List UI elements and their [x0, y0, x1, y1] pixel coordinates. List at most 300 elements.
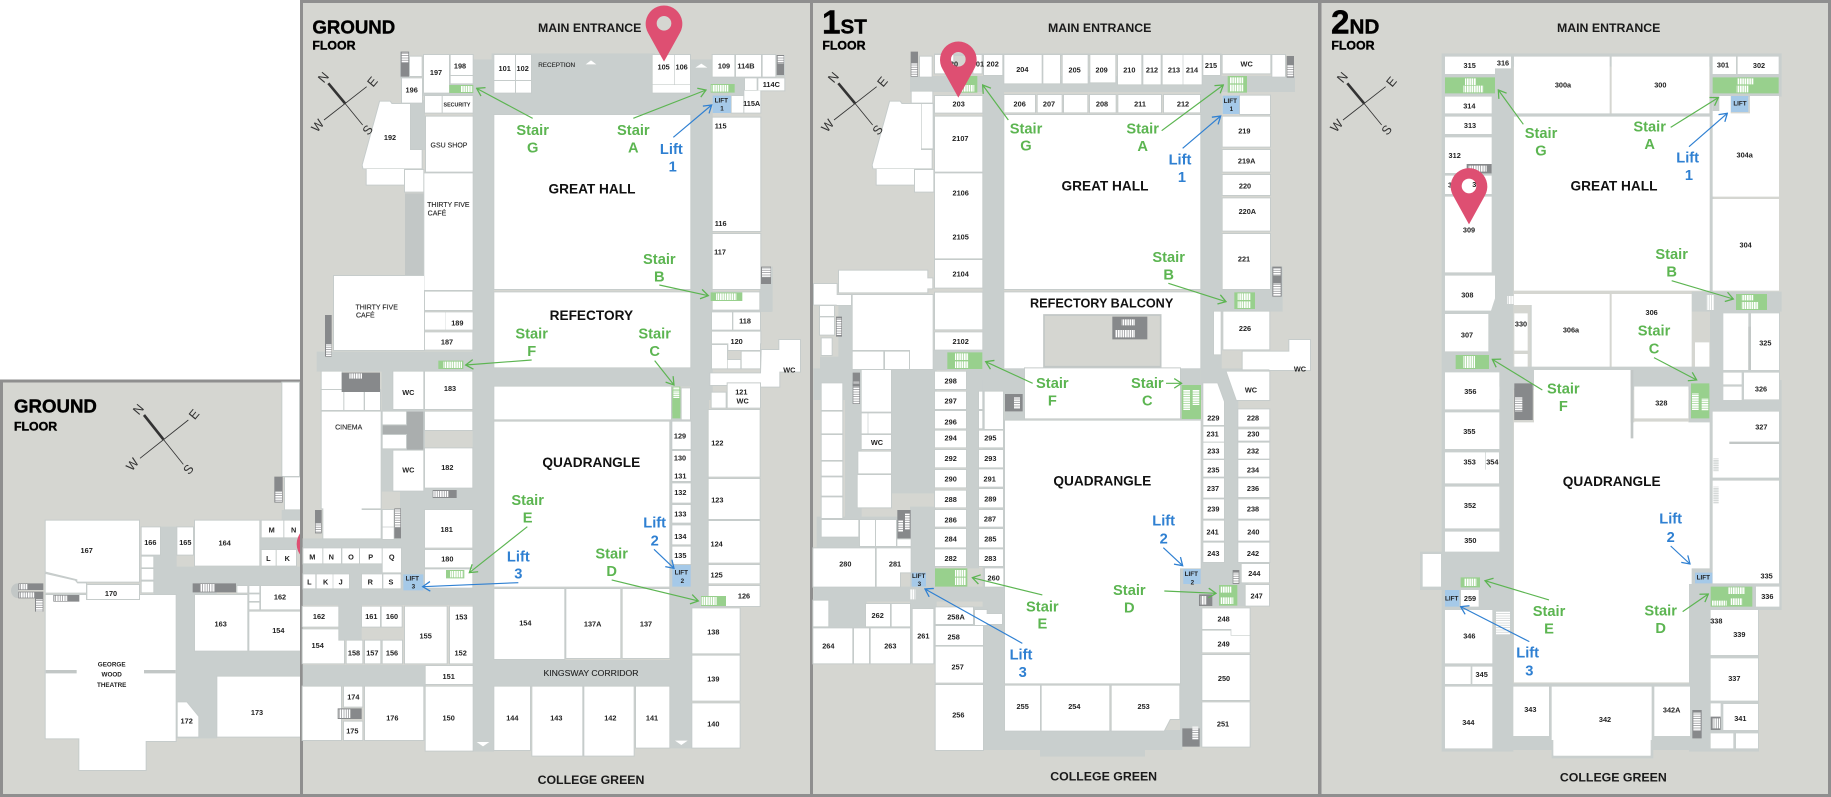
location names [1557, 21, 1667, 784]
room labels: 239 [1207, 505, 1219, 514]
room labels: 291 [984, 475, 996, 484]
room labels: 160 [386, 612, 398, 621]
room labels: RECEPTION [538, 62, 576, 69]
floor plan rooms [303, 55, 800, 756]
room labels: 315 [1464, 61, 1476, 70]
callout: lift 1: Lift [660, 142, 683, 158]
room labels: 124 [711, 539, 724, 548]
icon: location pin [1451, 168, 1487, 224]
room labels: 234 [1247, 465, 1260, 474]
location names: REFECTORY [550, 308, 633, 323]
callout: stair C: Stair [638, 326, 671, 342]
location names: GREAT HALL [1570, 179, 1657, 194]
room labels: 284 [945, 535, 958, 544]
room labels: 250 [1218, 674, 1230, 683]
room labels: 166 [144, 538, 156, 547]
room labels: 243 [1207, 549, 1219, 558]
location names: GREAT HALL [548, 181, 635, 196]
room labels: 263 [884, 641, 896, 650]
callout: stair F: Stair [1547, 382, 1580, 398]
compass: S [870, 122, 886, 138]
room labels: 207 [1043, 99, 1055, 108]
callout: lift 3 [925, 589, 1033, 681]
room labels: 233 [1207, 446, 1219, 455]
room labels: L [307, 578, 312, 587]
compass: W [819, 117, 837, 135]
room labels: 155 [420, 631, 432, 640]
callout: stair C [1638, 324, 1697, 380]
room labels: 153 [455, 612, 467, 621]
heading: first floor: 1ST [822, 4, 867, 41]
room labels: 230 [1247, 430, 1259, 439]
room labels: 248 [1218, 614, 1230, 623]
callout: stair F [1492, 359, 1580, 415]
room labels: 255 [1017, 702, 1029, 711]
room labels: 164 [219, 539, 232, 548]
room labels: 139 [707, 674, 719, 683]
room labels: 220A [1239, 207, 1257, 216]
location names: REFECTORY BALCONY [1030, 297, 1174, 311]
callout: stair G: Stair [1525, 126, 1558, 142]
location names: GREAT HALL [1061, 179, 1148, 194]
callout: lift 2: 2 [1667, 530, 1675, 546]
room labels: 134 [674, 532, 687, 541]
compass [123, 402, 202, 477]
room labels: 293 [984, 454, 996, 463]
room labels: 339 [1733, 630, 1745, 639]
room labels: 115A [743, 99, 761, 108]
room labels: 182 [441, 463, 453, 472]
room labels: 352 [1464, 501, 1476, 510]
location names: COLLEGE GREEN [1050, 770, 1157, 784]
room labels: THIRTY FIVE [355, 304, 398, 311]
heading: ground floor: GROUND [312, 16, 395, 37]
room labels: WC [783, 366, 796, 375]
callout: lift 1: 1 [669, 160, 677, 176]
room labels: 141 [646, 714, 658, 723]
room labels: 326 [1755, 385, 1767, 394]
room labels: 213 [1168, 65, 1180, 74]
room labels: 2102 [953, 337, 969, 346]
callout: stair E [1485, 581, 1566, 638]
room labels: 287 [984, 515, 996, 524]
panel: ground floor [302, 2, 812, 796]
room labels: 138 [707, 628, 719, 637]
room labels: 306 [1646, 308, 1658, 317]
callout: stair C: C [1649, 341, 1660, 357]
room labels: LIFT [1185, 571, 1198, 578]
room labels: 283 [984, 554, 996, 563]
room labels: 211 [1134, 99, 1146, 108]
heading: second floor: FLOOR [1331, 38, 1375, 52]
compass: W [1328, 117, 1346, 135]
callout: stair B: B [1666, 265, 1677, 281]
callout: stair C [1131, 376, 1182, 409]
room labels: 163 [215, 619, 227, 628]
callout: stair B [1152, 250, 1226, 302]
location names: MAIN ENTRANCE [1048, 21, 1151, 35]
room labels: 295 [984, 434, 996, 443]
room labels: 229 [1207, 414, 1219, 423]
room labels: 137A [584, 619, 602, 628]
room labels: 120 [731, 337, 743, 346]
room labels: 346 [1463, 632, 1475, 641]
room labels: 143 [550, 714, 562, 723]
room labels: WC [1241, 59, 1253, 68]
room labels: 117 [714, 247, 726, 256]
room labels: 316 [1497, 58, 1509, 67]
floor plan rooms [46, 383, 300, 770]
callout: stair D: Stair [1644, 604, 1677, 620]
panel: first floor [812, 2, 1320, 796]
room labels: 309 [1463, 225, 1475, 234]
room labels: 260 [988, 573, 1000, 582]
room labels: LIFT [1224, 98, 1237, 105]
room labels: 355 [1463, 427, 1475, 436]
callout: stair E: E [523, 511, 533, 527]
room labels: 106 [676, 63, 688, 72]
room labels: 237 [1207, 484, 1219, 493]
room labels: 342 [1599, 715, 1611, 724]
room labels: 247 [1251, 591, 1263, 600]
room labels: 152 [455, 648, 467, 657]
room labels: 118 [739, 317, 751, 326]
room labels: 2107 [952, 134, 968, 143]
room labels: 242 [1247, 549, 1259, 558]
room labels: 206 [1014, 99, 1026, 108]
compass: N [1334, 70, 1351, 86]
room labels: 198 [454, 61, 466, 70]
heading: ground floor: GROUND [14, 395, 97, 416]
room labels: 3 [412, 584, 416, 591]
room labels: 170 [105, 589, 117, 598]
stairs and lifts [836, 52, 1294, 747]
room labels: 353 [1464, 458, 1476, 467]
heading: second floor: 2ND [1331, 4, 1379, 41]
callout: stair B [1655, 247, 1733, 299]
room labels: 336 [1761, 592, 1773, 601]
compass: S [360, 122, 376, 138]
room labels: 249 [1218, 640, 1230, 649]
room labels: 2 [1191, 579, 1195, 586]
room labels: 312 [1449, 151, 1461, 160]
room labels: 187 [441, 337, 453, 346]
callout: lift 1: Lift [1169, 153, 1192, 169]
stairs and lifts [1445, 77, 1779, 738]
room labels: 2104 [953, 270, 970, 279]
callout: stair E: Stair [1533, 604, 1566, 620]
pin fragment [297, 526, 333, 562]
room labels: 231 [1207, 430, 1219, 439]
room labels: 219A [1238, 157, 1256, 166]
room labels: 300 [1654, 80, 1666, 89]
room labels: 354 [1486, 458, 1499, 467]
room labels: 240 [1247, 527, 1259, 536]
room labels: GSU SHOP [431, 143, 468, 150]
room labels: 197 [430, 68, 442, 77]
callout: stair F: Stair [515, 326, 548, 342]
room labels: 302 [1753, 61, 1765, 70]
room labels: LIFT [715, 97, 728, 104]
room labels: LIFT [675, 569, 688, 576]
callout: stair C: Stair [1638, 324, 1671, 340]
room labels: L [266, 554, 271, 563]
room labels: 130 [674, 453, 686, 462]
compass: N [825, 70, 842, 86]
room labels: 298 [945, 377, 957, 386]
compass [819, 70, 891, 138]
callout: stair D [595, 547, 698, 601]
room labels: 301 [1717, 61, 1729, 70]
compass: N [130, 402, 147, 418]
room labels: 114C [763, 80, 781, 89]
room labels: WC [1294, 364, 1307, 373]
room labels: 122 [711, 438, 723, 447]
room labels: WC [1245, 385, 1258, 394]
callout: stair B: Stair [1655, 247, 1688, 263]
room labels: 137 [640, 619, 652, 628]
room labels: 280 [839, 560, 851, 569]
room labels: 203 [953, 99, 965, 108]
callout: stair G: Stair [516, 123, 549, 139]
room labels [822, 59, 1307, 728]
icon: location pin [646, 5, 682, 62]
room labels: GEORGE [98, 661, 126, 668]
room labels: 123 [711, 495, 723, 504]
location names: MAIN ENTRANCE [538, 21, 641, 35]
callout: lift 1 [660, 105, 712, 176]
location names: COLLEGE GREEN [538, 773, 645, 787]
room labels: LIFT [1445, 596, 1458, 603]
callout: stair D: Stair [1113, 583, 1146, 599]
heading: first floor: FLOOR [822, 38, 866, 52]
room labels: 289 [984, 494, 996, 503]
room labels: 251 [1217, 719, 1229, 728]
room labels: 296 [945, 417, 957, 426]
room labels: 2106 [953, 188, 969, 197]
room labels: 3 [918, 581, 922, 588]
room labels: 308 [1461, 290, 1473, 299]
room labels: 232 [1247, 446, 1259, 455]
heading: ground floor: FLOOR [312, 38, 356, 52]
panel: ground floor west wing [2, 381, 333, 796]
room labels: 297 [945, 396, 957, 405]
room labels: 345 [1476, 670, 1488, 679]
floor plan rooms [813, 55, 1310, 750]
room labels: 288 [945, 495, 957, 504]
room labels: 142 [604, 714, 616, 723]
room labels: 286 [945, 515, 957, 524]
callout: lift 3: 3 [1019, 665, 1027, 681]
callout: stair A: Stair [1633, 120, 1666, 136]
callout: stair B: Stair [1152, 250, 1185, 266]
room labels: 144 [506, 714, 519, 723]
room labels: 156 [386, 648, 398, 657]
room labels: 154 [272, 626, 285, 635]
callout: lift 2: Lift [1659, 512, 1682, 528]
callout: stair E: E [1544, 622, 1554, 638]
room labels: CINEMA [335, 425, 363, 432]
compass: W [123, 455, 142, 474]
room labels: 126 [738, 592, 750, 601]
room labels: 238 [1247, 505, 1259, 514]
room labels: 192 [384, 133, 396, 142]
room labels: 212 [1146, 65, 1158, 74]
room labels: 173 [251, 708, 263, 717]
callout: stair C: C [649, 344, 660, 360]
room labels: 241 [1207, 527, 1219, 536]
callout: stair A [617, 90, 706, 157]
room labels: 115 [715, 122, 727, 131]
location names [538, 21, 645, 787]
room labels: 290 [945, 474, 957, 483]
callout: stair G: G [1535, 143, 1547, 159]
callout: lift 3: Lift [1010, 647, 1033, 663]
callout: stair G [477, 88, 549, 157]
compass: E [365, 74, 381, 90]
room labels: 337 [1728, 674, 1740, 683]
room labels: 253 [1138, 702, 1150, 711]
room labels [307, 61, 796, 736]
compass: E [1384, 74, 1400, 90]
room labels: 294 [945, 434, 958, 443]
callout: stair G [983, 85, 1043, 155]
room labels: 150 [443, 714, 455, 723]
callout: lift 1 [1676, 113, 1727, 184]
room labels: 292 [945, 454, 957, 463]
room labels: 327 [1755, 422, 1767, 431]
callout: stair D [1644, 594, 1708, 637]
room labels: 105 [658, 63, 670, 72]
room labels: 01 [976, 60, 984, 69]
room labels: 307 [1461, 330, 1473, 339]
room labels: 344 [1462, 718, 1475, 727]
callout: stair C [638, 326, 674, 385]
room labels: 259 [1464, 594, 1476, 603]
callout: lift 1 [1169, 116, 1221, 186]
heading: ground floor [14, 395, 97, 433]
callout: stair F: F [1559, 399, 1568, 415]
room labels: 256 [952, 710, 964, 719]
room labels: 236 [1247, 484, 1259, 493]
callout: stair D: Stair [595, 547, 628, 563]
room labels: 209 [1096, 65, 1108, 74]
room labels: S [389, 578, 394, 587]
callout: stair G: G [527, 141, 538, 157]
location names: QUADRANGLE [542, 455, 640, 470]
room labels: 313 [1464, 121, 1476, 130]
callout: lift 2: Lift [1152, 514, 1175, 530]
callout: stair B: B [1163, 267, 1174, 283]
callout: stair E: E [1037, 617, 1047, 633]
callout: stair B: Stair [643, 252, 676, 268]
callout: stair F [466, 326, 548, 365]
callout: lift 2: 2 [651, 533, 659, 549]
room labels: 208 [1096, 99, 1108, 108]
room labels [81, 526, 296, 726]
room labels: M [309, 552, 315, 561]
room labels: 101 [499, 64, 511, 73]
room labels: 335 [1761, 571, 1773, 580]
room labels: O [348, 552, 354, 561]
room labels: M [269, 526, 275, 535]
room labels: 220 [1239, 181, 1251, 190]
room labels: 300a [1555, 80, 1572, 89]
callout: stair F [986, 362, 1069, 409]
room labels: 133 [674, 510, 686, 519]
panel: second floor [1320, 2, 1830, 796]
callout: stair G [1498, 90, 1558, 159]
location names: QUADRANGLE [1563, 474, 1661, 489]
callout: lift 2 [1659, 512, 1690, 564]
room labels: K [285, 554, 291, 563]
callout: lift 1: Lift [1676, 150, 1699, 166]
room labels: 109 [718, 62, 730, 71]
room labels: 181 [441, 525, 453, 534]
floor plan rooms [1423, 57, 1779, 756]
room labels: 343 [1524, 705, 1536, 714]
callout: stair C: C [1142, 393, 1153, 409]
room labels: 254 [1068, 702, 1081, 711]
room labels: 264 [822, 641, 835, 650]
compass: S [181, 462, 197, 477]
room labels: 314 [1463, 101, 1476, 110]
room labels: 244 [1248, 569, 1261, 578]
location names: COLLEGE GREEN [1560, 770, 1667, 784]
callout: stair A [1126, 85, 1223, 155]
callout: stair A: A [1137, 139, 1148, 155]
callout: lift 2 [1152, 514, 1183, 566]
room labels: 3 [1448, 181, 1452, 190]
room labels: 235 [1207, 465, 1219, 474]
room labels: 258A [947, 612, 965, 621]
callout: stair D [1113, 583, 1216, 616]
compass: E [186, 407, 202, 422]
room labels: 338 [1710, 616, 1722, 625]
callout: stair C: Stair [1131, 376, 1164, 392]
room labels: 226 [1239, 324, 1251, 333]
room labels: LIFT [1697, 575, 1710, 582]
compass: N [315, 70, 332, 86]
room labels: 3 [1472, 180, 1476, 189]
room labels: SECURITY [444, 103, 471, 109]
room labels: KINGSWAY CORRIDOR [543, 668, 639, 678]
room labels: WC [402, 388, 415, 397]
callout: stair G: G [1020, 139, 1032, 155]
room labels: 202 [987, 60, 999, 69]
callout: lift 1: 1 [1685, 168, 1693, 184]
room labels: 281 [889, 560, 901, 569]
room labels: 258 [948, 632, 960, 641]
room labels: 165 [179, 538, 191, 547]
room labels: 219 [1238, 127, 1250, 136]
room labels: R [368, 578, 374, 587]
compass: E [875, 74, 891, 90]
room labels: CAFÉ [356, 311, 375, 320]
callout: stair F: F [1048, 393, 1057, 409]
room labels: WC [737, 397, 749, 406]
room labels: 114B [737, 62, 755, 71]
room labels: 125 [711, 570, 723, 579]
room labels: 189 [451, 318, 463, 327]
room labels: 175 [346, 727, 358, 736]
callout: stair F: Stair [1036, 376, 1069, 392]
room labels: 221 [1238, 254, 1250, 263]
room labels: N [291, 526, 296, 535]
callout: stair A: Stair [617, 123, 650, 139]
compass [309, 70, 381, 138]
room labels: 210 [1123, 65, 1135, 74]
